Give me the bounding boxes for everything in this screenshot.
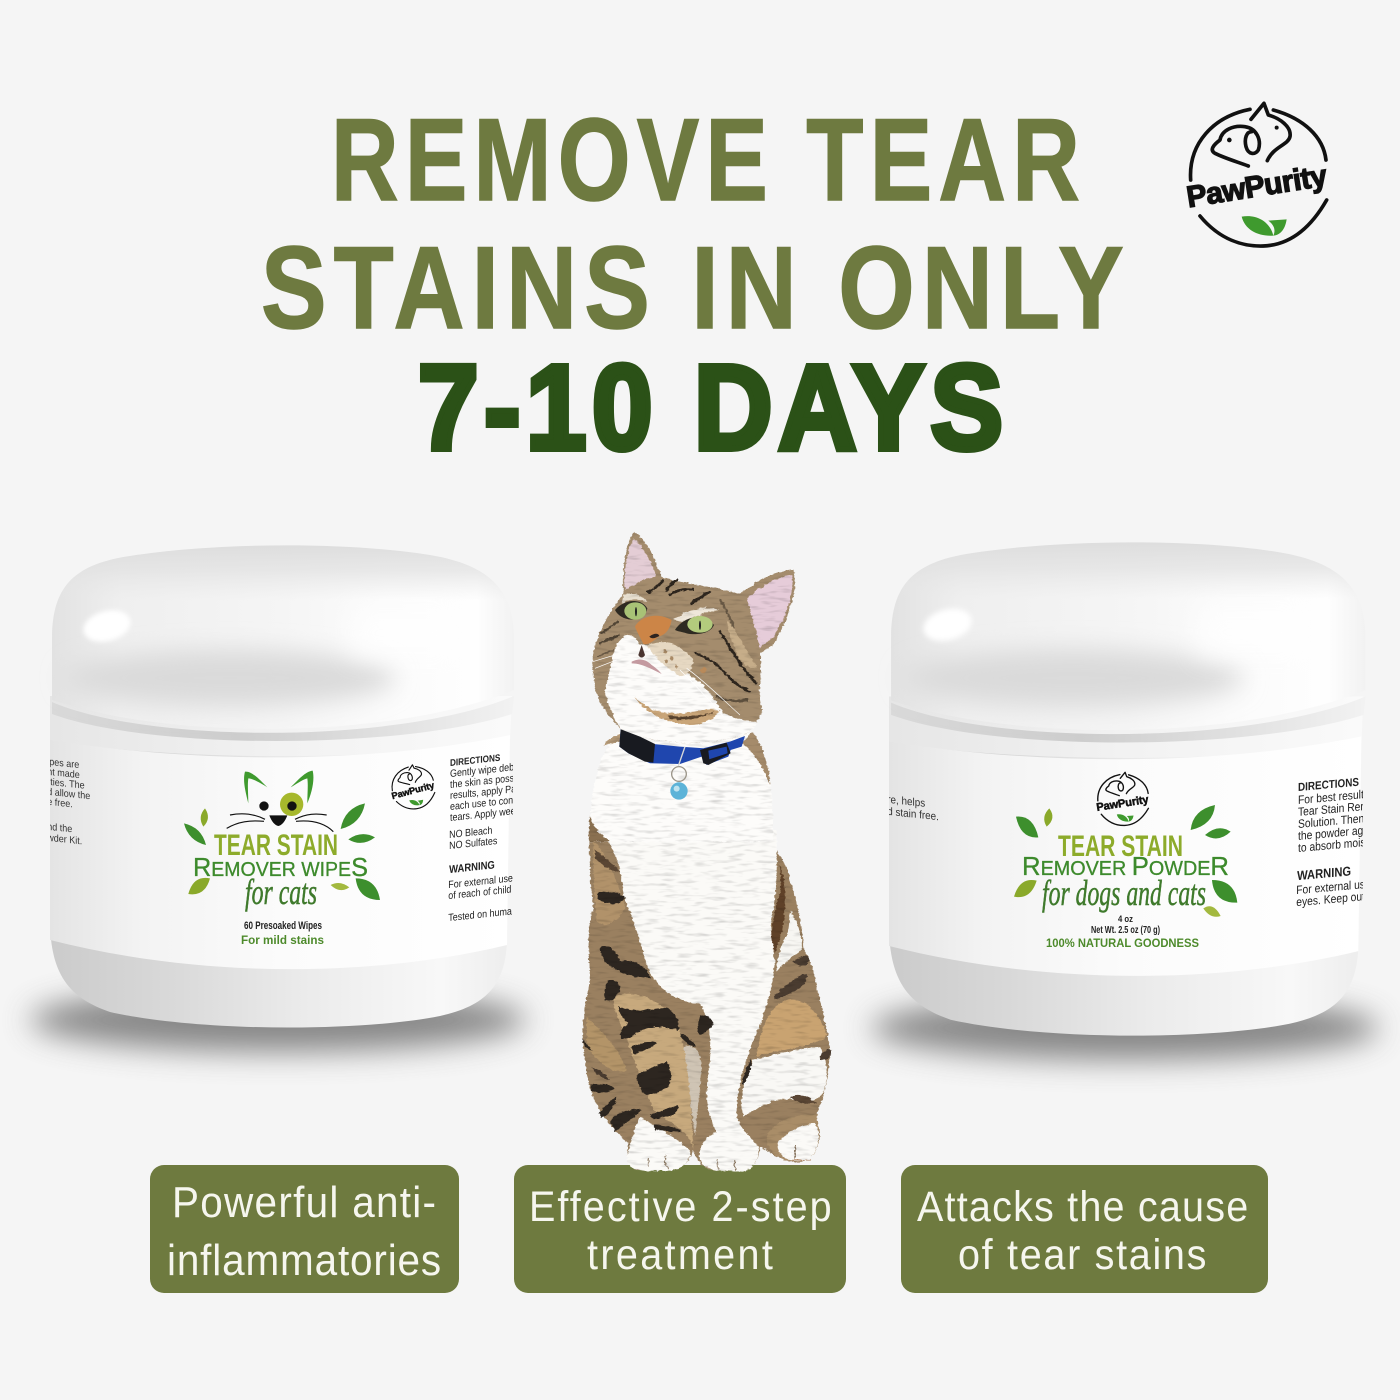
jar shadow	[871, 996, 1379, 1060]
left side wrapped label text: d stain free.	[887, 806, 939, 823]
small brand logo	[391, 764, 436, 810]
directions side text: DIRECTIONS	[450, 752, 500, 768]
title	[261, 95, 1124, 475]
head	[592, 532, 795, 743]
mouth	[632, 659, 662, 674]
whisker pad	[647, 642, 693, 677]
gap between legs	[683, 1046, 702, 1137]
directions side text	[1296, 778, 1363, 908]
leaves	[1014, 805, 1237, 917]
bell	[670, 782, 688, 800]
benefit badge: attacks the cause: of tear stains	[958, 1230, 1206, 1278]
title line 3: highlighted duration: 7-10 DAYS	[418, 341, 1003, 475]
directions side text: the skin as poss	[450, 773, 514, 791]
title line 2: STAINS IN ONLY	[261, 222, 1124, 353]
directions side text: For external us	[1296, 878, 1365, 897]
small brand logo: PawPurity	[1096, 794, 1150, 814]
left foreleg	[613, 994, 693, 1150]
small brand logo	[1096, 772, 1150, 825]
directions side text: Tear Stain Rem	[1298, 800, 1369, 819]
left side wrapped label text: wder Kit.	[46, 832, 82, 848]
left side wrapped label text: d allow the	[47, 786, 90, 802]
ear inner left	[625, 538, 657, 590]
nose	[635, 616, 672, 644]
directions side text: WARNING	[1297, 864, 1351, 883]
directions side text: tears. Apply wee	[450, 806, 516, 824]
jar label artwork: 100% NATURAL GOODNESS	[1046, 938, 1199, 950]
bell ring	[672, 767, 686, 781]
cat upper body and head	[589, 532, 795, 842]
directions side text: For external use	[448, 873, 513, 891]
benefit badge: 2-step treatment: treatment	[587, 1230, 773, 1278]
jar container	[889, 542, 1366, 1036]
product name: TEAR STAIN	[1058, 830, 1183, 863]
right paw	[767, 1115, 819, 1162]
directions side text: Tested on huma	[448, 906, 512, 924]
jar label artwork: for cats	[245, 872, 317, 912]
product jar: tear stain remover wipes	[30, 545, 526, 1052]
collar	[619, 729, 745, 765]
logo: PawPurity	[1184, 103, 1330, 246]
ear inner right	[747, 575, 792, 648]
small brand logo: PawPurity	[390, 780, 436, 801]
directions side text: results, apply Pa	[450, 783, 517, 802]
directions side text: Gently wipe debr	[450, 761, 518, 780]
directions side text: NO Bleach	[449, 825, 492, 841]
left side wrapped label text: e free.	[47, 796, 73, 811]
white chest and foreleg	[600, 830, 777, 1172]
left paw	[627, 1117, 690, 1171]
cat photo illustration	[582, 532, 832, 1172]
eyes	[615, 601, 647, 620]
directions side text: of reach of child	[448, 884, 511, 902]
product name: TEAR STAIN	[214, 829, 338, 862]
right shoulder white	[777, 910, 802, 972]
jar label artwork: Net Wt. 2.5 oz (70 g)	[1091, 925, 1160, 936]
title line 1: REMOVE TEAR	[331, 95, 1080, 225]
directions side text: the powder ag	[1298, 825, 1363, 843]
left side wrapped label text	[889, 796, 938, 820]
chest	[589, 730, 773, 842]
whiskers	[593, 655, 740, 717]
directions side text: NO Sulfates	[449, 835, 497, 852]
jar label artwork	[46, 750, 518, 947]
ginger neck band	[635, 697, 720, 725]
left side wrapped label text: ipes are	[47, 756, 79, 771]
jar shadow	[30, 988, 526, 1052]
tabby markings	[598, 580, 757, 701]
benefit badge: 2-step treatment: Effective 2-step	[529, 1182, 832, 1230]
leaves	[184, 803, 380, 900]
toe lines	[648, 1145, 812, 1170]
jar label artwork: REMOVER POWDER	[1022, 851, 1229, 881]
directions side text: DIRECTIONS	[1298, 776, 1359, 794]
benefit badge: attacks the cause: Attacks the cause	[917, 1182, 1248, 1230]
product jar: tear stain remover powder	[871, 542, 1379, 1060]
benefit badge: 2-step treatment	[514, 1165, 846, 1293]
directions side text: For best result	[1298, 789, 1365, 807]
left side wrapped label text: re, helps	[887, 794, 925, 810]
left side wrapped label text: rties. The	[47, 776, 85, 792]
shoulder patches	[603, 733, 627, 747]
directions side text: to absorb mois	[1298, 836, 1366, 855]
upper flank tan	[593, 840, 625, 925]
cat lower body	[582, 830, 832, 1172]
directions side text: WARNING	[449, 860, 495, 876]
left side wrapped label text	[50, 760, 90, 844]
dark tabby stripes	[582, 850, 832, 1132]
benefit badge: anti-inflammatories	[150, 1165, 459, 1293]
cat face mark	[184, 771, 380, 900]
directions side text	[448, 754, 513, 921]
jar label artwork: for dogs and cats	[1042, 873, 1206, 913]
ginger haunch	[757, 999, 827, 1057]
forehead light	[673, 608, 720, 622]
jar label artwork: 4 oz	[1118, 914, 1133, 924]
left side wrapped label text: nd the	[47, 821, 72, 835]
benefit badge: anti-inflammatories: Powerful anti-	[172, 1177, 436, 1226]
whisker pad dots	[663, 650, 707, 673]
directions side text: eyes. Keep out	[1296, 890, 1366, 909]
jar label artwork: For mild stains	[241, 933, 324, 947]
right haunch white	[742, 1047, 827, 1117]
benefit badge: attacks the cause	[901, 1165, 1268, 1293]
jar label artwork	[887, 772, 1369, 950]
jar container	[50, 545, 514, 1028]
directions side text: each use to con	[450, 795, 513, 813]
benefit badge: anti-inflammatories: inflammatories	[167, 1235, 441, 1284]
directions side text: Solution. Then,	[1298, 812, 1367, 831]
logo: PawPurity: PawPurity	[1184, 159, 1330, 214]
haunch tan	[586, 1017, 627, 1072]
jar label artwork: 60 Presoaked Wipes	[244, 920, 322, 932]
face white blaze and chin	[605, 635, 757, 743]
left side wrapped label text: nt made	[47, 766, 80, 781]
fur areas	[589, 532, 795, 842]
jar label artwork: REMOVER WIPES	[193, 852, 368, 882]
